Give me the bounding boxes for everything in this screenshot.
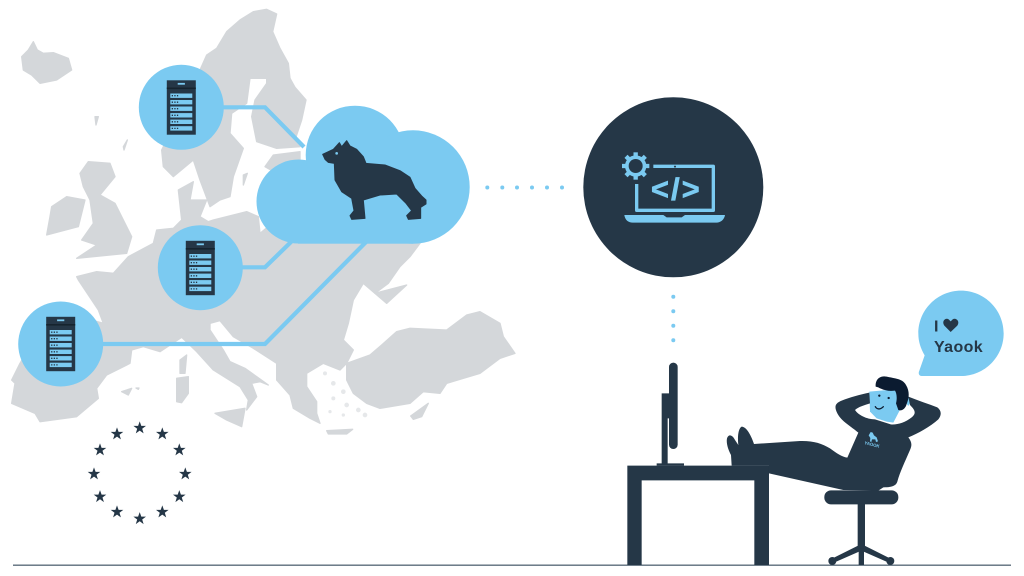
icon: yaook dog — [323, 141, 426, 219]
floor line — [13, 564, 1011, 566]
person — [727, 376, 941, 491]
laptop circle — [583, 97, 763, 277]
speech bubble: I — [934, 319, 938, 336]
dotted link: cloud to laptop — [485, 186, 564, 190]
server circle: west — [18, 302, 103, 386]
shirt logo — [864, 432, 881, 449]
speech bubble: Yaook — [934, 339, 983, 356]
map of Europe — [12, 9, 515, 434]
icon: laptop with gear — [622, 152, 725, 223]
shirt logo: YAOOK — [864, 440, 881, 449]
server circle: centre — [158, 225, 243, 310]
desk — [627, 466, 769, 565]
icon: laptop with gear: </> — [651, 173, 700, 207]
dotted link: laptop to desk — [671, 295, 675, 342]
desk scene — [627, 291, 1004, 565]
monitor — [657, 363, 684, 466]
office chair — [824, 490, 898, 565]
cloud — [256, 106, 470, 244]
EU stars — [88, 421, 192, 524]
server circle: north — [139, 65, 224, 150]
connector lines — [100, 107, 367, 344]
speech bubble — [918, 291, 1004, 376]
